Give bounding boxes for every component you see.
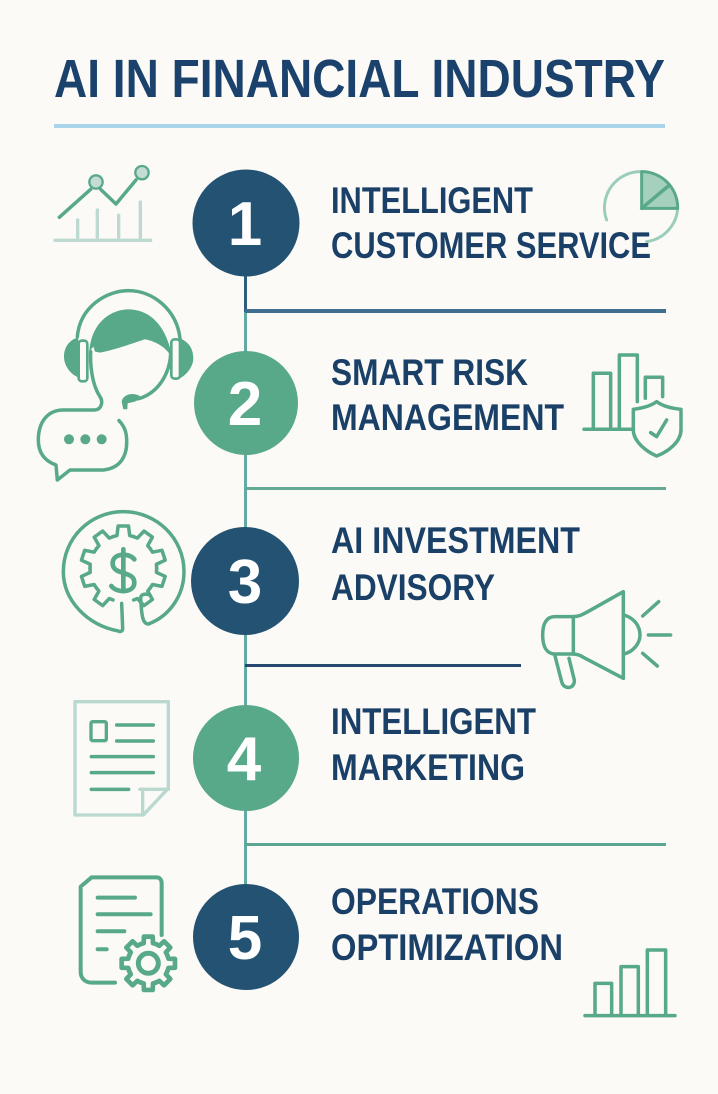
icon: gear with dollar sign: [63, 512, 184, 631]
step 5: OPTIMIZATION: [331, 927, 563, 968]
icon: line chart: [55, 166, 151, 240]
step 5: 5: [228, 904, 262, 973]
step 2: [194, 351, 564, 455]
icon: megaphone: [543, 592, 671, 687]
timeline connector: [244, 270, 666, 892]
step 2: SMART RISK: [331, 352, 528, 393]
icon: pie chart: [604, 172, 678, 242]
icon: document with fold: [75, 702, 168, 815]
step 3: ADVISORY: [331, 567, 495, 608]
icon: support agent headset with speech bubble: [38, 291, 193, 480]
step 2: 2: [228, 370, 262, 439]
step 3: AI INVESTMENT: [331, 520, 580, 561]
step 1: CUSTOMER SERVICE: [331, 225, 651, 266]
step 2: MANAGEMENT: [331, 397, 564, 438]
step 1: INTELLIGENT: [331, 180, 533, 221]
icon: bar chart with shield: [584, 355, 681, 456]
step 5: [193, 881, 563, 990]
step 1: [192, 170, 651, 276]
step 1: 1: [228, 190, 262, 259]
step 3: 3: [228, 548, 262, 617]
step 3: [191, 520, 580, 635]
icon: document with gear: [81, 877, 175, 990]
icon: rising bars: [585, 950, 675, 1016]
step 4: [193, 701, 536, 811]
step 4: MARKETING: [331, 747, 525, 788]
step 4: INTELLIGENT: [331, 701, 536, 742]
step 5: OPERATIONS: [331, 881, 539, 922]
step 4: 4: [227, 725, 262, 794]
